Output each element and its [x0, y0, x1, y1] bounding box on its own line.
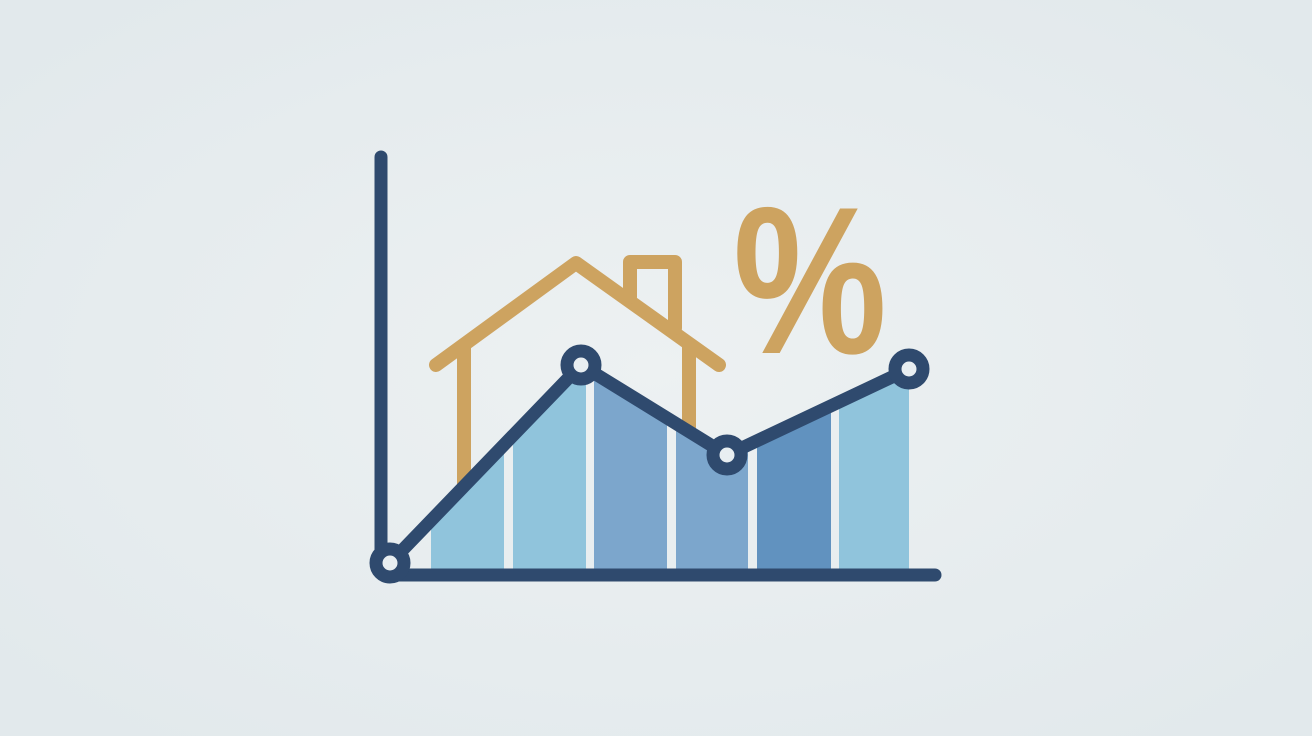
infographic: housing chart: [370, 150, 942, 584]
axes: [381, 157, 935, 575]
line chart: [376, 351, 923, 577]
bar chart: [431, 380, 909, 568]
icon: house: [436, 262, 719, 500]
percent sign: %: [733, 163, 887, 398]
